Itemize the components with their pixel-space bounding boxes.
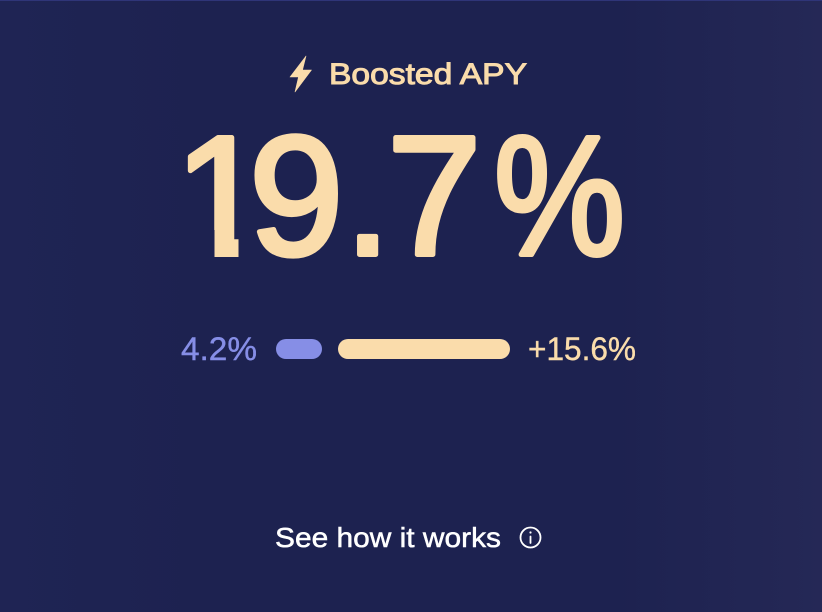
main value: 19.7%: 9.7 <box>249 102 482 292</box>
heading text: Boosted APY <box>329 58 527 91</box>
icon: lightning bolt <box>290 56 312 92</box>
main value: 19.7%: % <box>494 102 625 292</box>
link text: See how it works <box>275 522 501 553</box>
link: see how it works <box>275 522 540 553</box>
boost APY label: +15.6% <box>528 331 636 367</box>
icon: info circle <box>520 528 540 548</box>
heading: boosted APY <box>290 56 527 92</box>
main value: 19.7%: 1 <box>174 102 269 292</box>
base APY bar segment <box>276 339 322 359</box>
top edge highlight <box>0 0 822 1</box>
base APY label: 4.2% <box>181 331 257 367</box>
boost bar segment <box>338 339 510 359</box>
APY breakdown bar <box>181 331 636 367</box>
main value: 19.7% <box>188 133 622 259</box>
